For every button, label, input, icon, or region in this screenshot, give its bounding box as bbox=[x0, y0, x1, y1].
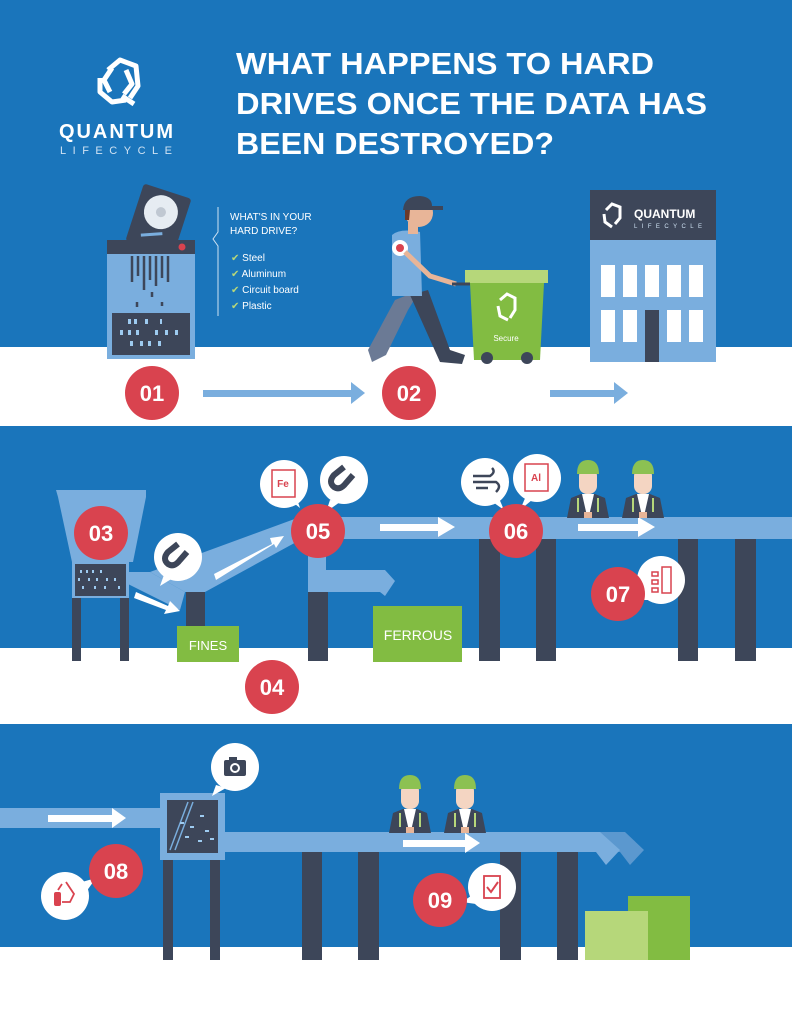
ferrous box bbox=[373, 606, 462, 662]
worker pushing bin bbox=[368, 196, 548, 364]
icon: hard drive bbox=[125, 183, 192, 256]
step 07: 07 bbox=[606, 582, 630, 607]
title: BEEN DESTROYED? bbox=[236, 126, 554, 161]
white arrows bbox=[134, 517, 655, 614]
workers section 3 bbox=[389, 775, 486, 833]
icon: logo mark bbox=[100, 60, 138, 104]
text block: what's in your hard drive bbox=[213, 207, 312, 316]
icon: clipboard bubble bbox=[462, 863, 516, 911]
text block: what's in your hard drive: ✔ Aluminum bbox=[231, 269, 286, 280]
step 08 bbox=[89, 844, 143, 898]
step 04 bbox=[245, 660, 299, 714]
building bbox=[590, 190, 716, 362]
step 09 bbox=[413, 873, 467, 927]
fines box bbox=[177, 626, 239, 662]
text block: what's in your hard drive: HARD DRIVE? bbox=[230, 226, 298, 237]
step 04: 04 bbox=[260, 675, 285, 700]
logo: LIFECYCLE bbox=[60, 145, 172, 157]
hopper bbox=[56, 490, 146, 562]
step 06 bbox=[489, 504, 543, 558]
icon: secure bin: Secure bbox=[493, 334, 519, 343]
step 01: 01 bbox=[140, 381, 164, 406]
step 07 bbox=[591, 567, 645, 621]
icon: Al bubble: Al bbox=[531, 473, 541, 484]
building: LIFECYCLE bbox=[634, 224, 702, 230]
text block: what's in your hard drive: ✔ Circuit board bbox=[231, 285, 299, 296]
title: DRIVES ONCE THE DATA HAS bbox=[236, 86, 707, 121]
icon: magnet bubble 1 bbox=[154, 533, 202, 586]
arrow 02 to building bbox=[550, 382, 628, 404]
belts bbox=[128, 517, 792, 610]
step 09: 09 bbox=[428, 888, 452, 913]
green output boxes bbox=[585, 896, 690, 960]
logo bbox=[59, 60, 173, 157]
step 02 bbox=[382, 366, 436, 420]
title bbox=[236, 46, 707, 161]
section 2 conveyor bbox=[56, 490, 792, 661]
step 01 bbox=[125, 366, 179, 420]
step 06: 06 bbox=[504, 519, 528, 544]
step 02: 02 bbox=[397, 381, 421, 406]
icon: wind bubble bbox=[461, 458, 509, 510]
icon: Fe bubble bbox=[260, 460, 308, 508]
text block: what's in your hard drive: ✔ Steel bbox=[231, 253, 265, 264]
shredder with hard drive bbox=[107, 183, 195, 359]
brand name: QUANTUM bbox=[59, 121, 173, 143]
icon: Fe bubble: Fe bbox=[277, 479, 289, 490]
icon: recycle bubble bbox=[41, 872, 96, 920]
step 03 bbox=[74, 506, 128, 560]
building: QUANTUM bbox=[634, 207, 695, 221]
icon: circuit bubble bbox=[636, 556, 685, 604]
icon: magnet bubble 2 bbox=[320, 456, 368, 512]
ferrous box: FERROUS bbox=[384, 627, 452, 643]
arrow 01 to 02 bbox=[203, 382, 365, 404]
workers section 2 bbox=[567, 460, 664, 518]
section 3 conveyor bbox=[0, 793, 644, 960]
step 03: 03 bbox=[89, 521, 113, 546]
title: WHAT HAPPENS TO HARD bbox=[236, 46, 654, 81]
text block: what's in your hard drive: ✔ Plastic bbox=[231, 301, 272, 312]
fines box: FINES bbox=[189, 638, 227, 653]
step 08: 08 bbox=[104, 859, 128, 884]
icon: Al bubble bbox=[513, 454, 561, 510]
legs bbox=[72, 538, 756, 661]
step 05 bbox=[291, 504, 345, 558]
icon: secure bin bbox=[452, 270, 548, 364]
step 05: 05 bbox=[306, 519, 330, 544]
text block: what's in your hard drive: WHAT'S IN YOUR bbox=[230, 212, 312, 223]
icon: camera bubble bbox=[211, 743, 259, 796]
